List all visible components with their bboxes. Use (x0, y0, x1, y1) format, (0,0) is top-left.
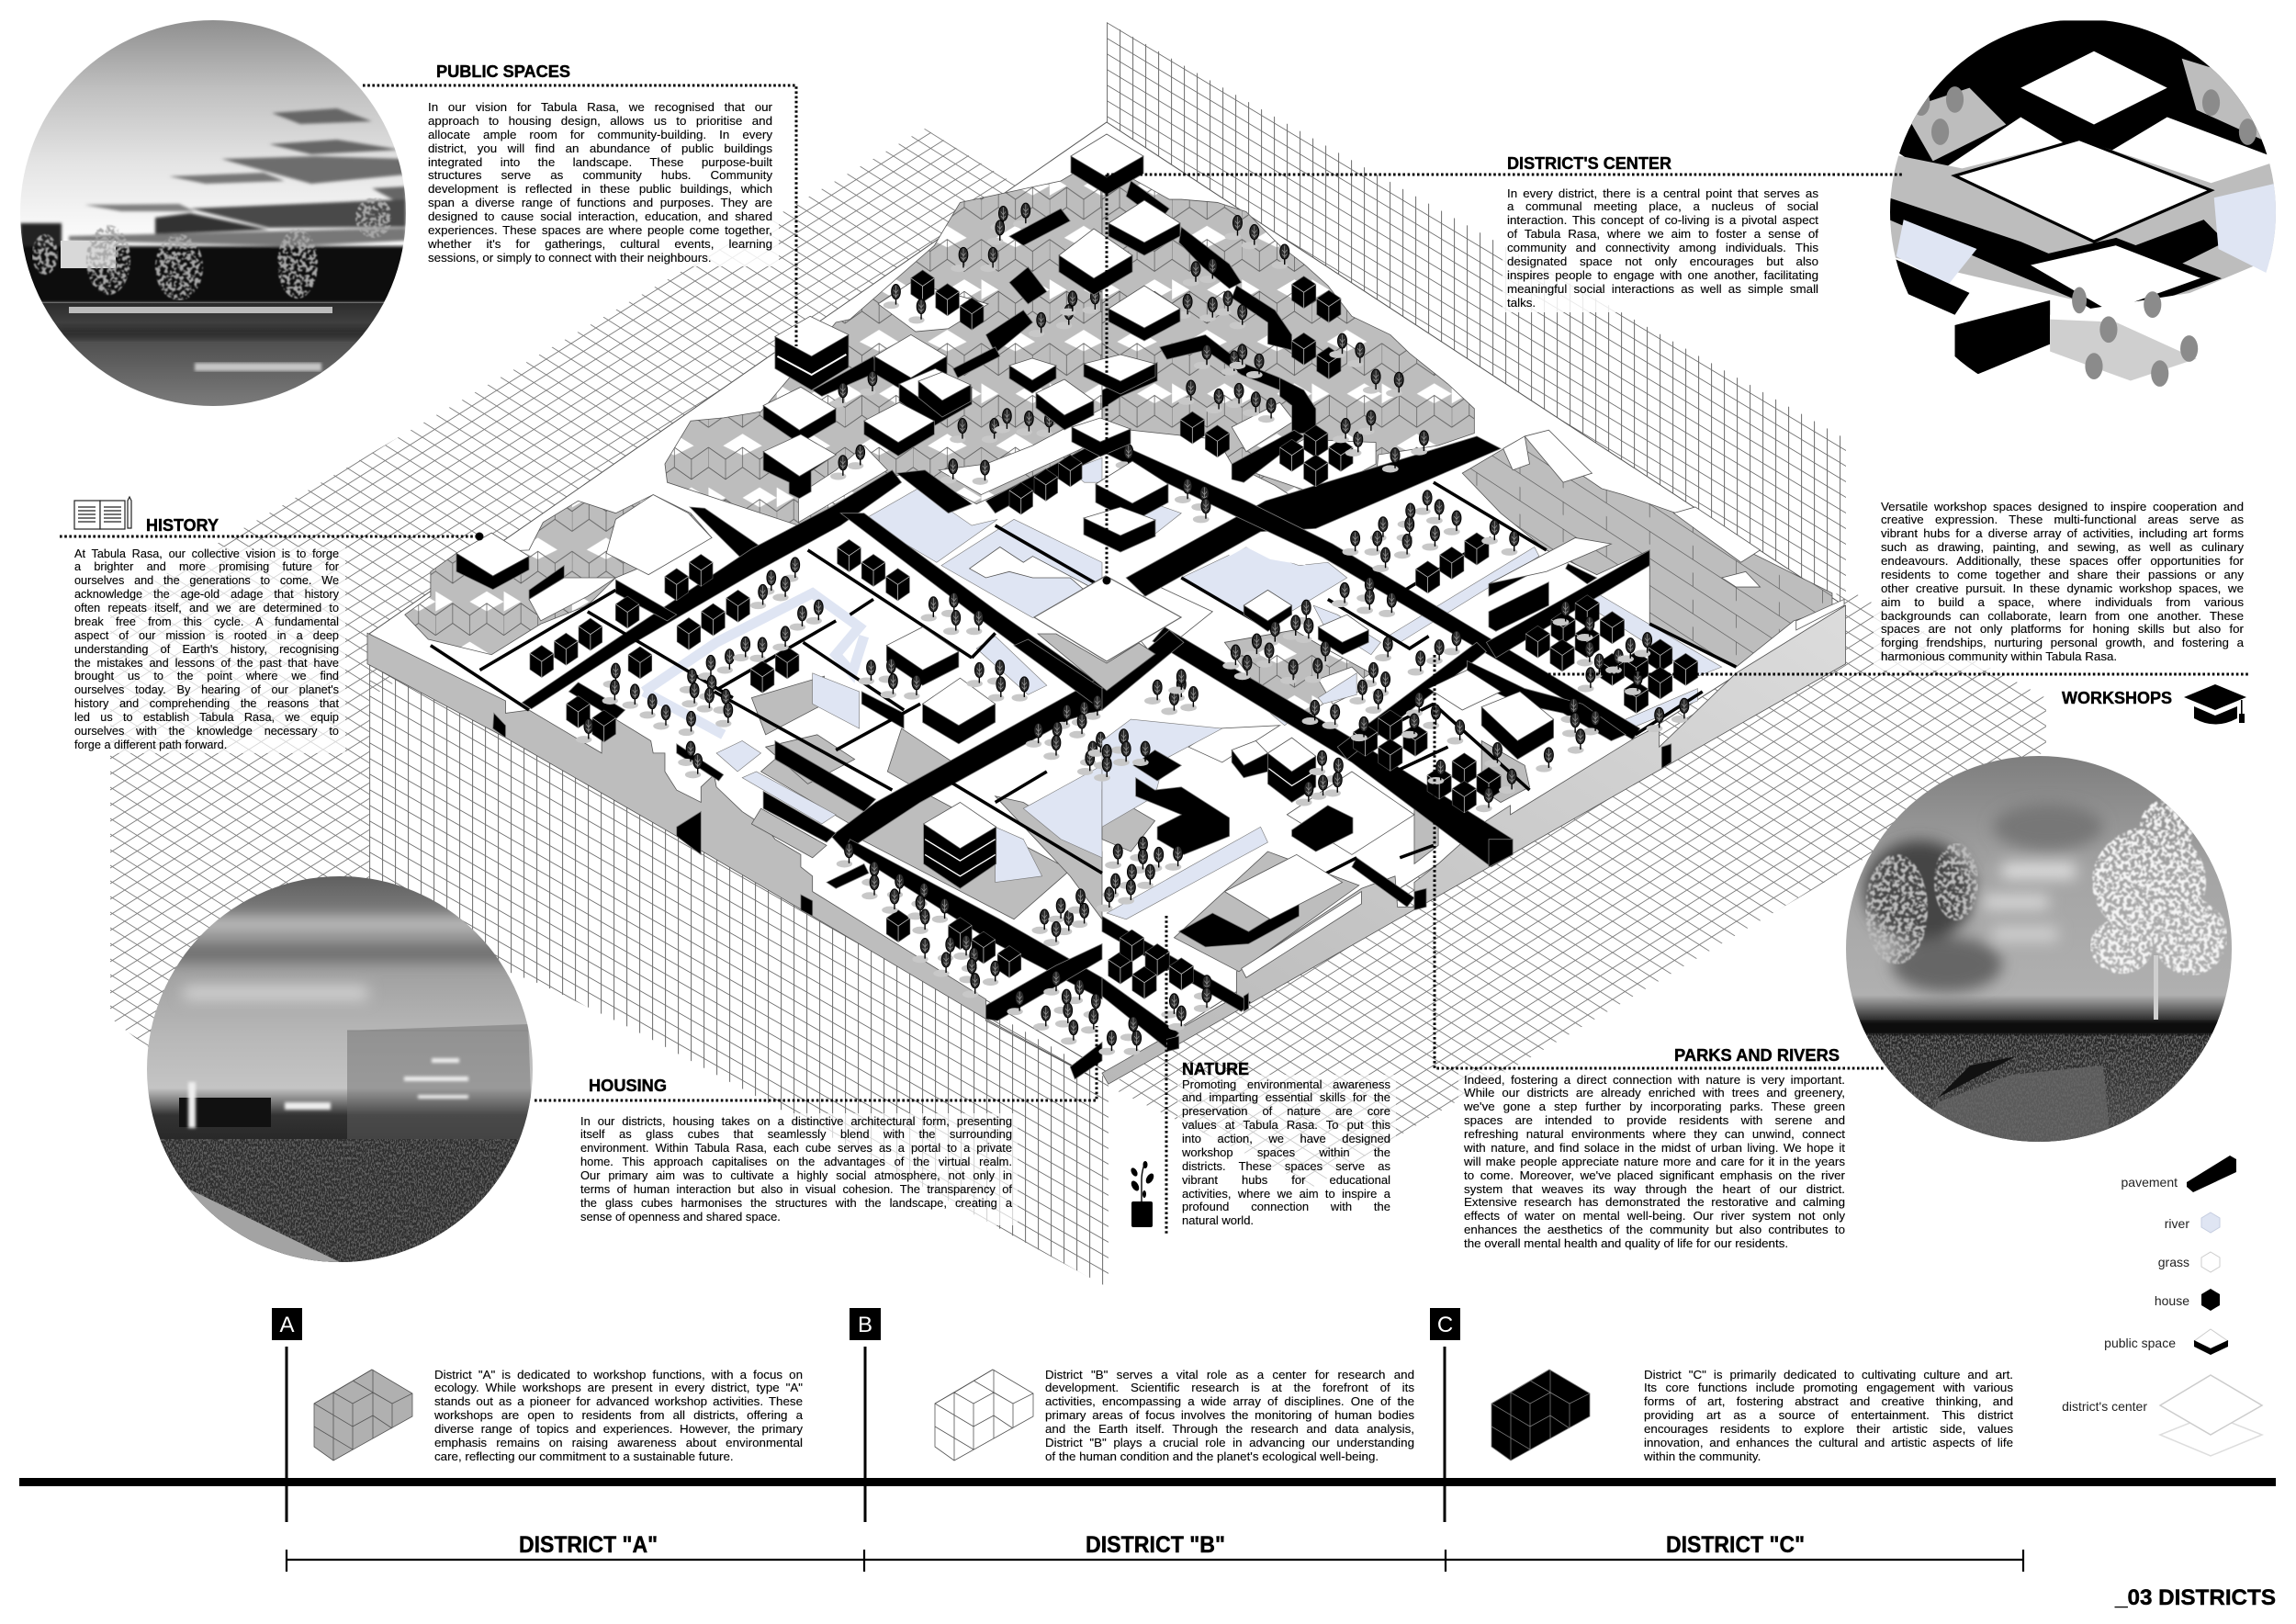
photo circle: public spaces (20, 20, 406, 406)
text block: public spaces: whether it's for gatherings, cultural events, learning (428, 237, 772, 251)
text block: nature: workshop spaces within the (1182, 1145, 1390, 1159)
leader: history (60, 533, 483, 540)
photo circle: parks and rivers (1846, 756, 2232, 1142)
text block: public spaces: approach to housing design, allows us to prioritise and (428, 114, 772, 128)
icon: district C block (1491, 1370, 1590, 1460)
label: district B: DISTRICT "B" (1086, 1532, 1225, 1558)
text block: history: break free from this cycle. A fundamental (74, 615, 339, 628)
left cluster white tops (529, 495, 712, 621)
text block: workshops: such as drawing, painting, and sewing, as well as culinary (1881, 540, 2244, 554)
label: district A: DISTRICT "A" (519, 1532, 658, 1558)
text block: housing: sense of openness and shared space. (580, 1210, 781, 1224)
legend: house: house (2155, 1293, 2189, 1308)
text block: nature: values at Tabula Rasa. To put this (1182, 1118, 1390, 1132)
text block: workshops: aim to build a space, where individuals from various (1881, 595, 2244, 609)
text block: district C: providing art as a source of entertainment. This district (1644, 1408, 2013, 1422)
text block: district's center: inspires people to engage with one another, facilitating (1507, 268, 1818, 282)
text block: district B: development. Scientific research is at the forefront of its (1045, 1381, 1414, 1394)
text block: nature: and imparting essential skills for the (1182, 1090, 1390, 1104)
leader: parks and rivers (1435, 655, 1885, 1068)
text block: housing: home. This approach capitalises on the advantages of the virtual realm. (580, 1155, 1012, 1168)
text block: history: understanding of Earth's history, recognising (74, 643, 339, 656)
legend: public space (2104, 1329, 2228, 1355)
district B marker (850, 1308, 881, 1522)
text block: parks and rivers: Extensive research has demonstrated the restorative and calming (1464, 1195, 1845, 1209)
text block: district's center: In every district, there is a central point that serves as (1507, 186, 1818, 200)
platform right side face (1102, 605, 1846, 1084)
text block: district A: District "A" is dedicated to workshop functions, with a focus on (434, 1367, 803, 1382)
left half of city, gray terraces and plots (367, 156, 1105, 1082)
district A marker: A (279, 1313, 295, 1337)
text block: nature: Promoting environmental awareness (1182, 1077, 1390, 1091)
text block: district's center: a communal meeting place, a nucleus of social (1507, 199, 1818, 213)
text block: nature: districts. These spaces serve as (1182, 1159, 1390, 1173)
text block: parks and rivers (1464, 1073, 1846, 1250)
text block: parks and rivers: effects of water on mental well-being. Our river system not only (1464, 1209, 1845, 1223)
leader: district's center (1102, 175, 1903, 584)
legend (2062, 1156, 2262, 1456)
text block: history: At Tabula Rasa, our collective vision is to forge (74, 547, 339, 560)
text block: district C: forms of art, fostering abstract and creative thinking, and (1644, 1394, 2013, 1408)
icon: graduation cap (2184, 684, 2246, 724)
legend: grass: grass (2158, 1255, 2189, 1269)
isometric city model (367, 122, 1846, 1084)
soft white backing behind text blocks (68, 96, 2250, 1251)
text block: workshops: endeavours. Additionally, these spaces offer opportunities for (1881, 554, 2244, 568)
platform left side face (367, 633, 1102, 1082)
upper terrace white tops (798, 282, 1102, 523)
text block: district B: District "B" plays a crucial role in advancing our understanding (1045, 1436, 1414, 1449)
leader: public spaces (363, 85, 796, 346)
district C marker: C (1437, 1313, 1453, 1337)
river white island right (1227, 532, 1306, 566)
wall gap (1477, 381, 1515, 459)
heading: history: HISTORY (146, 516, 219, 535)
text block: history: ourselves with the knowledge necessary to (74, 725, 339, 738)
text block: district's center: meaningful social interactions as well as simple small (1507, 282, 1818, 296)
text block: district's center: community and connectivity among individuals. This (1507, 241, 1818, 254)
right half of city (1094, 178, 1846, 1084)
text block: workshops: Versatile workshop spaces designed to inspire cooperation and (1881, 500, 2244, 513)
central plaza: district's centre (1034, 576, 1181, 661)
text block: district's center: of Tabula Rasa, where we aim to foster a sense of (1507, 227, 1818, 241)
district C marker (1430, 1308, 1460, 1522)
text block: housing: itself as glass cubes that seamlessly blend with the surrounding (580, 1127, 1012, 1141)
text block: public spaces: integrated into the landscape. These purpose-built (428, 154, 772, 169)
text block: history: aspect of our mission is rooted in a deep (74, 629, 339, 642)
left cluster terraces (405, 495, 712, 655)
river inner white island (970, 547, 1102, 605)
text block: history: the mistakes and lessons of the past that have (74, 656, 339, 669)
text block: district C: District "C" is primarily dedicated to cultivating culture and art. (1644, 1367, 2013, 1382)
text block: district B (1045, 1367, 1414, 1463)
icon: district A block (314, 1370, 412, 1460)
wall grid: back right (1107, 22, 1846, 611)
text block: parks and rivers: to come. Moreover, we've placed significant emphasis on the river (1464, 1168, 1845, 1182)
text block: nature (1181, 1077, 1390, 1227)
text block: history: acknowledge the age-old adage that history (74, 588, 339, 601)
main roads, left half (493, 209, 1102, 1079)
label: district C: DISTRICT "C" (1666, 1532, 1805, 1558)
legend: pavement (2122, 1156, 2236, 1192)
legend: river (2165, 1212, 2220, 1233)
text block: public spaces: span a diverse range of functions and purposes. They are (428, 196, 772, 209)
text block: workshops: backgrounds can collaborate, learn from one another. These (1881, 608, 2244, 623)
text block: public spaces: structures serve as community hubs. Community (428, 168, 772, 182)
text block: public spaces: experiences. These spaces are where people come together, (428, 223, 772, 237)
leader: workshops (1548, 672, 2250, 676)
legend: river: river (2165, 1216, 2189, 1231)
text block: housing: In our districts, housing takes on a distinctive architectural form, presenting (580, 1113, 1012, 1128)
legend: public space: public space (2104, 1336, 2176, 1350)
text block: district's center: interaction. This concept of co-living is a pivotal aspect (1507, 213, 1818, 227)
text block: district B: District "B" serves a vital role as a center for research and (1045, 1367, 1414, 1382)
text block: district C: Its core functions include promoting engagement with various (1644, 1381, 2013, 1394)
dimension line: district spans (287, 1550, 2023, 1572)
legend: house (2155, 1289, 2220, 1311)
gray base under the central plaza (1038, 634, 1155, 691)
text block: parks and rivers: Indeed, fostering a direct connection with nature is very important. (1464, 1073, 1845, 1086)
photo circle: housing (146, 875, 533, 1262)
floor grid: front right (1109, 588, 2046, 1187)
text block: nature: natural world. (1182, 1213, 1254, 1227)
text block: district A: care, reflecting our commitment to a sustainable future. (434, 1449, 734, 1463)
text block: history: ourselves today. By hearing of our planet's (74, 683, 339, 696)
text block: parks and rivers: will make people appreciate nature more and care for it in the years (1464, 1155, 1845, 1168)
photo circle: district's center (1890, 20, 2276, 387)
text block: workshops (1881, 500, 2245, 663)
mid gray plots (1102, 630, 1529, 972)
upper terraces (665, 156, 1102, 525)
text block: district A: emphasis remains on raising awareness about environmental (434, 1436, 803, 1449)
legend: district's center: district's center (2062, 1399, 2147, 1414)
text block: public spaces: designed to cause social interaction, education, and shared (428, 209, 772, 223)
text block: history: led us to establish Tabula Rasa, we equip (74, 711, 339, 724)
text block: nature: preservation of nature are core (1182, 1104, 1390, 1118)
text block: district A: ecology. While workshops are present in every district, type "A" (434, 1381, 803, 1394)
text block: public spaces (428, 100, 773, 265)
wall grid: front left (369, 657, 1109, 1288)
river segments (644, 457, 1102, 883)
page label: _03 DISTRICTS (2114, 1585, 2276, 1610)
text block: history (74, 547, 339, 751)
heading: public spaces: PUBLIC SPACES (436, 62, 570, 81)
district A marker (272, 1308, 302, 1522)
text block: workshops: residents to come together and share their passions or any (1881, 568, 2244, 581)
text block: district A (433, 1367, 803, 1463)
text block: district A: stands out as a pioneer for advanced workshop activities. These (434, 1394, 803, 1408)
far right terraces (1462, 436, 1832, 667)
upper right terrace white tops (1232, 402, 1376, 495)
text block: public spaces: In our vision for Tabula Rasa, we recognised that our (428, 100, 772, 114)
text block: history: forge a different path forward. (74, 739, 227, 751)
legend: pavement: pavement (2122, 1175, 2178, 1190)
text block: district C: innovation, and enhances the cultural and artistic aspects of life (1644, 1436, 2013, 1449)
upper right terraces (1102, 178, 1474, 513)
text block: workshops: creative expression. These multi-functional areas serve as (1881, 513, 2244, 526)
text block: public spaces: sessions, or simply to connect with their neighbours. (428, 251, 712, 265)
text block: parks and rivers: system that weaves its way through the heart of our district. (1464, 1181, 1845, 1196)
legend: district's center (2062, 1375, 2262, 1456)
text block: district A: workshops are open to residents from all districts, offering a (434, 1408, 803, 1422)
district B marker: B (858, 1313, 872, 1337)
thin roads, left half (431, 525, 1102, 874)
district panel rule (19, 1478, 2276, 1486)
trees, left half (576, 203, 1105, 1044)
text block: workshops: vibrant hubs for a diverse array of activities, including art forms (1881, 526, 2244, 540)
text block: nature: into action, we have designed (1182, 1132, 1390, 1145)
text block: district's center: designated space not only encourages but also (1507, 254, 1818, 268)
text block: workshops: other creative pursuit. In these dynamic workshop spaces, we (1881, 581, 2244, 595)
icon: district B block (935, 1370, 1033, 1460)
text block: nature: vibrant hubs for educational (1182, 1173, 1390, 1187)
text block: nature: profound connection with the (1182, 1200, 1390, 1213)
text block: parks and rivers: While our districts are already enriched with trees and greenery, (1464, 1086, 1845, 1100)
text block: housing: terms of human interaction but also in visual cohesion. The transparency of (580, 1182, 1012, 1196)
text block: parks and rivers: spaces are intended to provide residents with serene and (1464, 1113, 1845, 1127)
mid gray plots (751, 676, 1102, 919)
text block: nature: activities, where we aim to inspire a (1182, 1187, 1390, 1200)
floor grid: back left (110, 129, 1107, 1047)
text block: housing (580, 1113, 1012, 1224)
text block: district B: primary areas of focus involves the monitoring of human bodies (1045, 1408, 1414, 1422)
icon: plant in pot (1130, 1161, 1155, 1227)
buildings straddling the centre axis (918, 134, 1180, 552)
text block: parks and rivers: the overall mental health and quality of life for our residents. (1464, 1236, 1788, 1250)
leader: nature (1165, 916, 1168, 1235)
text block: workshops: harmonious community within Tabula Rasa. (1881, 649, 2117, 663)
icon: book and pencil (74, 497, 131, 529)
text block: housing: environment. Within Tabula Rasa, each cube serves as a portal to a private (580, 1141, 1012, 1155)
text block: workshops: spaces are not only platforms for honing skills but also for (1881, 622, 2244, 636)
buildings, right half (1224, 537, 1611, 977)
text block: history: ourselves and the generations to come. We (74, 574, 339, 587)
platform top face (369, 122, 1845, 1073)
buildings, left half (456, 316, 996, 888)
text block: district C: within the community. (1644, 1449, 1761, 1463)
heading: district's center: DISTRICT'S CENTER (1507, 154, 1671, 173)
text block: housing: Our primary aim was to cultivate a highly social atmosphere, not only in (580, 1168, 1012, 1182)
text block: history: brought us to the point where we find (74, 670, 339, 682)
text block: public spaces: district, you will find an abundance of public buildings (428, 141, 772, 155)
text block: parks and rivers: with nature, and find solace in the midst of urban living. We hope it (1464, 1141, 1845, 1155)
leader: housing (535, 1026, 1097, 1100)
text block: district B: of the human condition and the planet's ecological well-being. (1045, 1449, 1379, 1463)
thin roads, right half (1181, 482, 1736, 895)
text block: district C: encourages residents to explore their artistic side, values (1644, 1422, 2013, 1436)
trees, right half (1094, 215, 1689, 1055)
heading: housing: HOUSING (589, 1077, 667, 1095)
text block: workshops: forging frendships, nurturing personal growth, and fostering a (1881, 636, 2244, 649)
white plots (1117, 587, 1414, 854)
text block: parks and rivers: enhances the aesthetics of the community but also contributes to (1464, 1223, 1845, 1236)
heading: workshops: WORKSHOPS (2062, 689, 2172, 707)
main roads, right half (1102, 181, 1671, 1052)
text block: district's center (1507, 186, 1818, 309)
text block: parks and rivers: we've gone a step further by incorporating parks. These green (1464, 1100, 1845, 1113)
text block: public spaces: allocate ample room for community-building. In every (428, 128, 772, 141)
text block: district B: activities, encompassing a wide array of disciplines. One of the (1045, 1394, 1414, 1408)
legend: grass (2158, 1252, 2220, 1272)
text block: public spaces: development is reflected in these public buildings, which (428, 182, 772, 196)
heading: parks and rivers: PARKS AND RIVERS (1674, 1046, 1840, 1065)
text block: history: often repeats itself, and we are determined to (74, 602, 339, 615)
river segments, right half (1102, 504, 1722, 919)
text block: parks and rivers: refreshing natural environments where they can unwind, connect (1464, 1127, 1845, 1141)
far right white strips (1503, 430, 1844, 630)
text block: district C (1644, 1367, 2013, 1463)
text block: housing: the glass cubes harmonises the structures with the landscape, creating a (580, 1196, 1012, 1210)
heading: nature: NATURE (1182, 1060, 1249, 1078)
cubes, right half (1109, 276, 1698, 998)
text block: history: a brighter and more promising future for (74, 560, 339, 573)
cubes, left half (530, 270, 1082, 977)
text block: district's center: talks. (1507, 296, 1536, 309)
text block: district A: diverse range of topics and experiences. However, the primary (434, 1422, 803, 1436)
text block: district B: and the Earth itself. Through the research and data analysis, (1045, 1422, 1414, 1436)
text block: history: history and comprehending the reasons that (74, 697, 339, 710)
